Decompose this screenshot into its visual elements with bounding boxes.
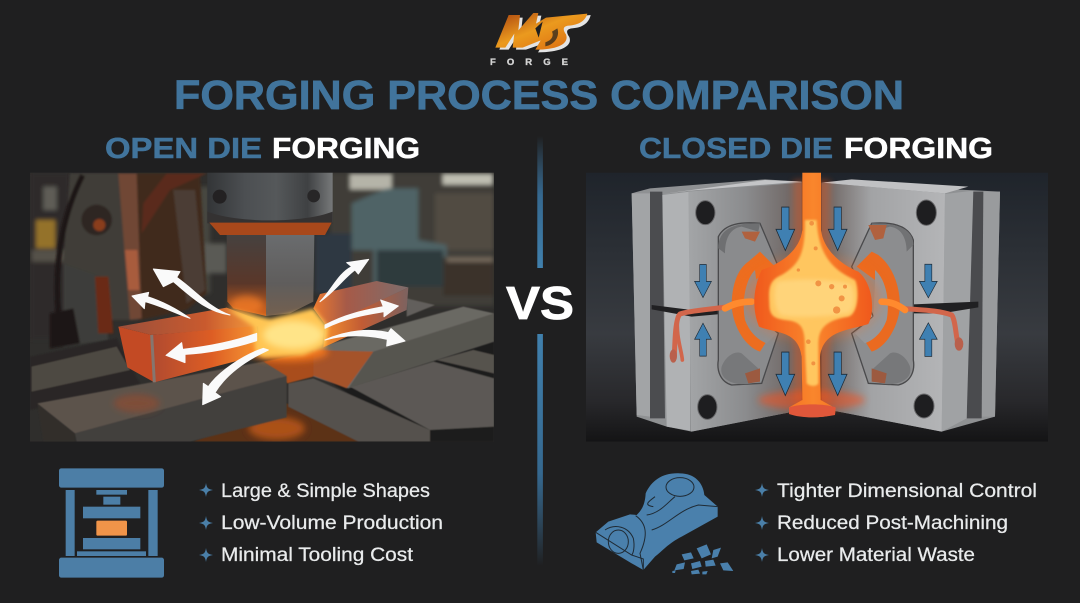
divider top [537, 136, 543, 268]
divider bottom [537, 334, 543, 566]
workpiece [118, 281, 408, 382]
press ram [227, 235, 314, 316]
list: open die benefits [199, 481, 443, 566]
molten flash right [882, 302, 963, 351]
VS label: VS [506, 277, 574, 329]
bolt holes [696, 200, 936, 419]
hot forged part [754, 173, 872, 417]
right anvil plate [263, 307, 494, 388]
list: open die benefits: Low-Volume Production [221, 513, 443, 534]
blue press arrows [695, 207, 937, 396]
right cavity [852, 223, 914, 385]
left cavity [718, 223, 778, 385]
list: closed die benefits: Tighter Dimensional Control [777, 481, 1037, 502]
heading: open die forging: FORGING [272, 133, 420, 165]
front anvil plate [37, 362, 287, 442]
panel: open die forging photo illustration [30, 173, 494, 442]
list: closed die benefits: Lower Material Waste [777, 545, 975, 566]
heading: open die forging: OPEN DIE [105, 133, 262, 165]
metal scrap [672, 544, 733, 574]
logo wordmark: FORGE [490, 57, 568, 68]
left die block [632, 179, 802, 432]
right die block [822, 179, 1000, 432]
table plates [30, 298, 494, 442]
press cylinder [207, 173, 333, 235]
panel: closed die forging photo illustration [586, 173, 1048, 442]
heading: closed die forging [639, 133, 993, 165]
heading: open die forging [105, 133, 420, 165]
heading: closed die forging: CLOSED DIE [639, 133, 833, 165]
list: closed die benefits [755, 481, 1037, 566]
list: open die benefits: Large & Simple Shapes [221, 481, 430, 502]
title: FORGING PROCESS COMPARISON [174, 72, 904, 118]
icon: closed die forged part with scrap [596, 473, 733, 574]
heading: closed die forging: FORGING [844, 133, 993, 165]
list: open die benefits: Minimal Tooling Cost [221, 545, 414, 566]
list: closed die benefits: Reduced Post-Machining [777, 513, 1008, 534]
white flow arrows [132, 259, 405, 405]
logo: MTS Forge [490, 13, 591, 68]
icon: forging press [59, 468, 164, 578]
press frame column [50, 173, 207, 348]
hot billet [96, 521, 127, 536]
blurred workshop background [30, 172, 494, 306]
glow around part [743, 257, 880, 340]
molten flash left [670, 302, 752, 363]
